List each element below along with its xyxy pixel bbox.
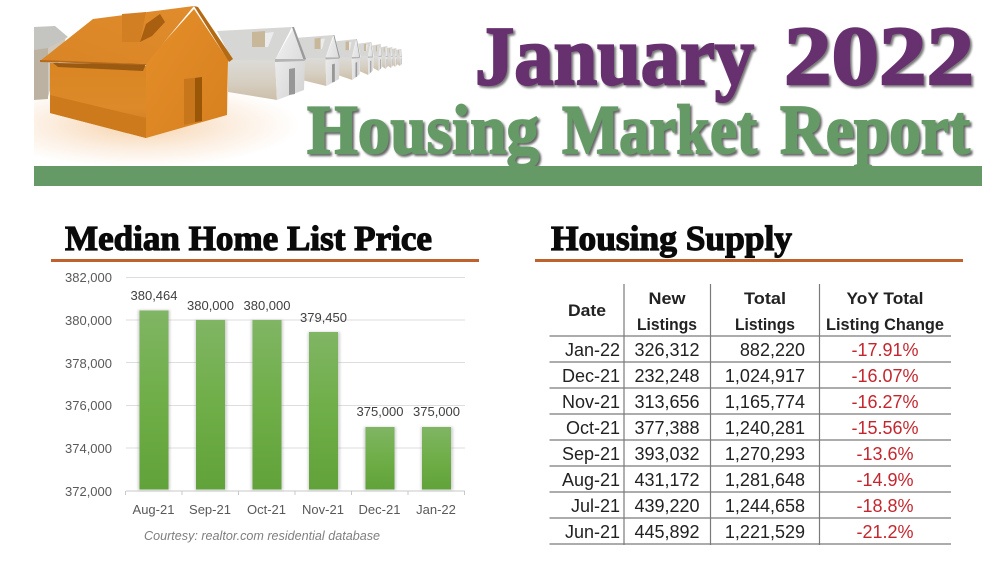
- x axis labels: Jan-22: [416, 502, 456, 517]
- table: [550, 284, 951, 545]
- row Dec-21: [562, 366, 919, 386]
- row Aug-21: 431,172: [634, 470, 700, 490]
- row Jul-21: 439,220: [634, 496, 700, 516]
- x axis labels: Aug-21: [133, 502, 174, 517]
- row Aug-21: 1,281,648: [725, 470, 805, 490]
- y axis labels: 374,000: [65, 441, 112, 456]
- title line 2: Market: [562, 92, 757, 169]
- row Oct-21: 1,240,281: [725, 418, 805, 438]
- y axis labels: 378,000: [65, 356, 112, 371]
- row Nov-21: [562, 392, 919, 412]
- row Aug-21: Aug-21: [562, 470, 620, 490]
- table header: Listing Change: [826, 315, 944, 334]
- title line 1: [475, 10, 974, 103]
- row Jun-21: 1,221,529: [725, 522, 805, 542]
- ground glow behind the house: [34, 96, 282, 162]
- y axis labels: 376,000: [65, 398, 112, 413]
- title line 2: Housing: [307, 92, 539, 169]
- row Dec-21: -16.07%: [851, 366, 919, 386]
- row Jun-21: -21.2%: [856, 522, 914, 542]
- y axis labels: 382,000: [65, 270, 112, 285]
- data labels: 375,000: [356, 404, 404, 419]
- row Sep-21: [562, 444, 914, 464]
- row Jul-21: 1,244,658: [725, 496, 805, 516]
- row Jun-21: Jun-21: [565, 522, 620, 542]
- row Dec-21: 1,024,917: [725, 366, 805, 386]
- row Aug-21: [562, 470, 914, 490]
- row Jan-22: [565, 340, 919, 360]
- data labels: 380,000: [187, 298, 234, 313]
- row Sep-21: Sep-21: [562, 444, 620, 464]
- row Sep-21: 1,270,293: [725, 444, 805, 464]
- x axis labels: Nov-21: [302, 502, 344, 517]
- table header: Date: [568, 301, 606, 320]
- row Jun-21: 445,892: [634, 522, 700, 542]
- row Jul-21: Jul-21: [571, 496, 620, 516]
- row Nov-21: 1,165,774: [725, 392, 805, 412]
- row Jun-21: [565, 522, 914, 542]
- data labels: 375,000: [413, 404, 460, 419]
- title line 2: Report: [780, 92, 970, 169]
- data labels: 379,450: [300, 310, 347, 325]
- y axis labels: 372,000: [65, 484, 112, 499]
- bars: [140, 310, 451, 490]
- heading: median home list price: Median Home List Price: [65, 219, 432, 258]
- title line 1: 2022: [784, 10, 974, 103]
- source note: Courtesy: realtor.com residential database: [144, 529, 380, 543]
- title line 2: [307, 92, 970, 169]
- row Nov-21: 313,656: [634, 392, 700, 412]
- bar chart: [65, 270, 465, 517]
- heading rule: [535, 259, 963, 262]
- row Oct-21: [566, 418, 919, 438]
- panel: median home list price: [51, 219, 479, 543]
- data labels: [130, 288, 460, 419]
- header banner: [0, 6, 982, 186]
- row Aug-21: -14.9%: [856, 470, 914, 490]
- grid lines and axis: [126, 278, 465, 495]
- row Dec-21: Dec-21: [562, 366, 620, 386]
- x axis labels: Oct-21: [247, 502, 286, 517]
- row Jan-22: 882,220: [740, 340, 805, 360]
- row Oct-21: 377,388: [634, 418, 700, 438]
- table header: YoY Total: [846, 289, 924, 308]
- row of grey houses: [217, 27, 402, 100]
- data labels: 380,000: [244, 298, 290, 313]
- left background house: [34, 26, 68, 100]
- row Sep-21: -13.6%: [856, 444, 914, 464]
- row Dec-21: 232,248: [634, 366, 700, 386]
- row Nov-21: Nov-21: [562, 392, 620, 412]
- row Oct-21: Oct-21: [566, 418, 620, 438]
- x axis labels: Dec-21: [359, 502, 400, 517]
- y axis labels: 380,000: [65, 313, 112, 328]
- row Sep-21: 393,032: [634, 444, 700, 464]
- row Jan-22: Jan-22: [565, 340, 620, 360]
- heading rule: [51, 259, 479, 262]
- row Nov-21: -16.27%: [851, 392, 919, 412]
- row Jul-21: [571, 496, 914, 516]
- x axis labels: Sep-21: [189, 502, 231, 517]
- row Oct-21: -15.56%: [851, 418, 919, 438]
- table header: Listings: [637, 315, 697, 334]
- row Jul-21: -18.8%: [856, 496, 914, 516]
- heading: housing supply: Housing Supply: [551, 219, 792, 258]
- x axis labels: [133, 502, 456, 517]
- row Jan-22: -17.91%: [851, 340, 919, 360]
- title line 1: January: [475, 10, 754, 103]
- table header: Listings: [735, 315, 795, 334]
- row Jan-22: 326,312: [634, 340, 700, 360]
- table header: Total: [744, 289, 786, 308]
- data labels: 380,464: [130, 288, 178, 303]
- table header: [568, 289, 944, 334]
- y axis labels: [65, 270, 112, 499]
- bar shadows: [138, 310, 453, 490]
- table header: New: [648, 289, 686, 308]
- orange house: [40, 6, 233, 138]
- green banner bar: [34, 166, 982, 186]
- panel: housing supply: [535, 219, 963, 545]
- table lines: [550, 284, 951, 545]
